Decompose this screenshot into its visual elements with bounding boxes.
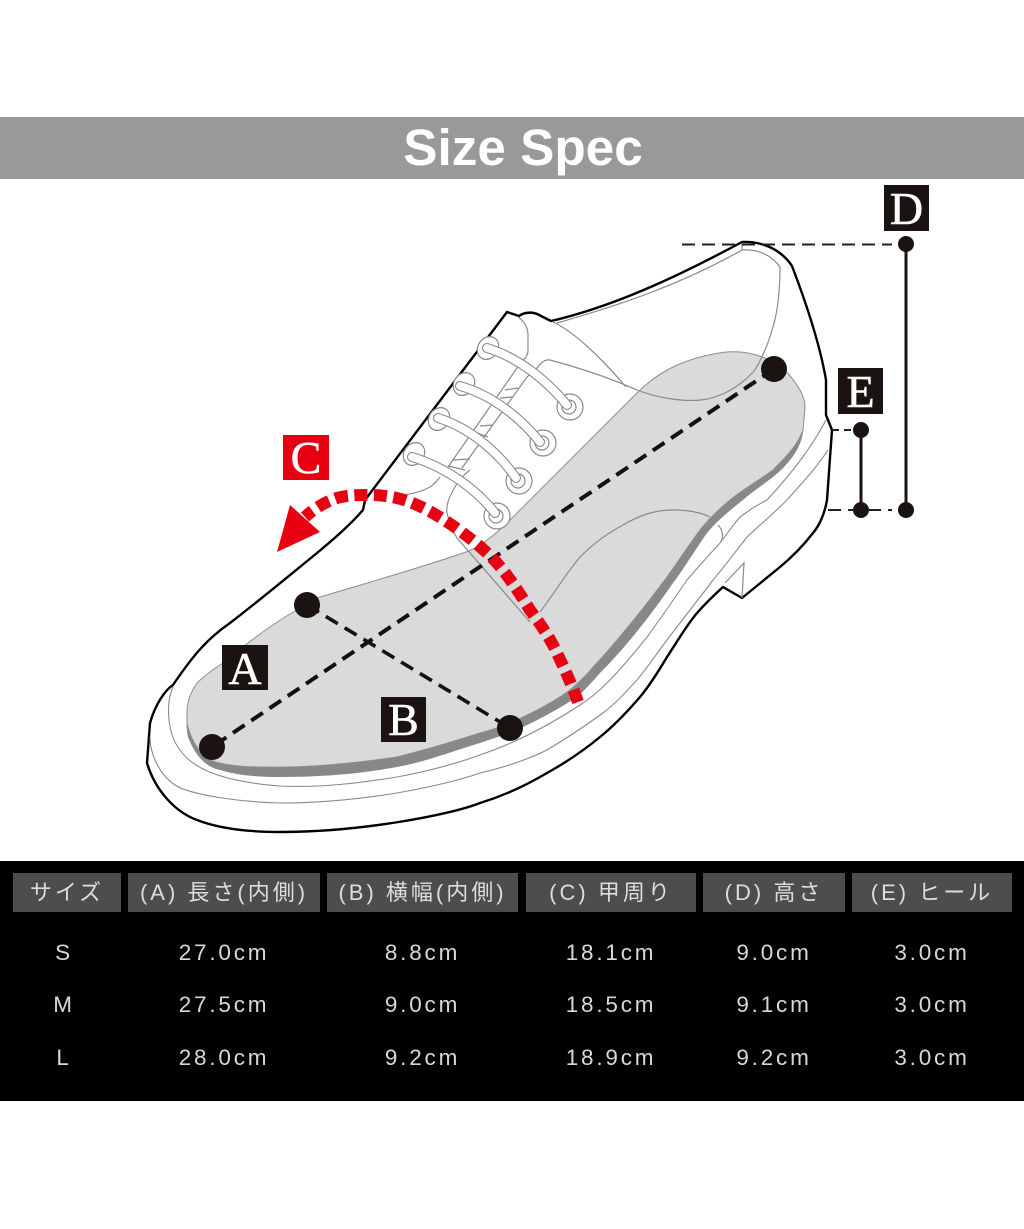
header: A: [128, 873, 320, 912]
row M: 27.5cm: [179, 992, 269, 1017]
label C: C: [291, 432, 321, 483]
eyelets: [399, 332, 583, 529]
row S: S: [55, 940, 73, 965]
shoe diagram with measurement marks: [146, 183, 929, 834]
header: サイズ: サイズ: [30, 880, 104, 905]
heel step: [725, 563, 744, 598]
row M: 18.5cm: [566, 992, 656, 1017]
row L: L: [56, 1045, 72, 1070]
title band: Size Spec: Size Spec: [403, 119, 643, 176]
insole grey surface: [187, 352, 805, 767]
measure D line: [682, 236, 914, 518]
header: B: [327, 873, 518, 912]
label E: E: [846, 366, 875, 417]
header: E: [852, 873, 1012, 912]
title band: Size Spec: [0, 117, 1024, 179]
header: D: (D) 高さ: [725, 880, 823, 905]
label B: [381, 694, 426, 745]
row M: [53, 992, 970, 1017]
row L: 9.2cm: [736, 1045, 812, 1070]
header: C: [526, 873, 696, 912]
row M: M: [53, 992, 75, 1017]
upper seam lines: [397, 244, 780, 622]
measure A line: [199, 356, 787, 760]
header: A: (A) 長さ(内側): [140, 880, 308, 905]
row M: 9.1cm: [736, 992, 812, 1017]
lace stripes: [448, 388, 518, 470]
row S: 9.0cm: [736, 940, 812, 965]
laces: [412, 348, 567, 513]
measure C red arc with arrow: [277, 495, 578, 702]
row S: [55, 940, 970, 965]
label D: D: [890, 183, 923, 234]
welt lines: [150, 420, 828, 803]
shoe illustration: [147, 242, 832, 832]
row S: 27.0cm: [179, 940, 269, 965]
label C: [283, 432, 329, 483]
row M: 3.0cm: [894, 992, 970, 1017]
row M: 9.0cm: [385, 992, 460, 1017]
row L: 9.2cm: [385, 1045, 460, 1070]
label B: B: [388, 694, 419, 745]
size table: [0, 861, 1024, 1101]
label E: [838, 366, 883, 417]
header: E: (E) ヒール: [871, 880, 993, 905]
shoe outer outline: [147, 242, 832, 832]
header: サイズ: [13, 873, 121, 912]
row L: 18.9cm: [566, 1045, 656, 1070]
measure B line: [294, 592, 523, 741]
row L: 28.0cm: [179, 1045, 269, 1070]
row L: [56, 1045, 970, 1070]
header: B: (B) 横幅(内側): [338, 880, 507, 905]
row S: 3.0cm: [894, 940, 970, 965]
row S: 8.8cm: [385, 940, 460, 965]
row S: 18.1cm: [566, 940, 656, 965]
header: C: (C) 甲周り: [549, 880, 673, 905]
insole side band: [187, 407, 805, 777]
header: D: [703, 873, 845, 912]
label A: A: [228, 643, 262, 694]
row L: 3.0cm: [894, 1045, 970, 1070]
measure E line: [832, 422, 869, 518]
